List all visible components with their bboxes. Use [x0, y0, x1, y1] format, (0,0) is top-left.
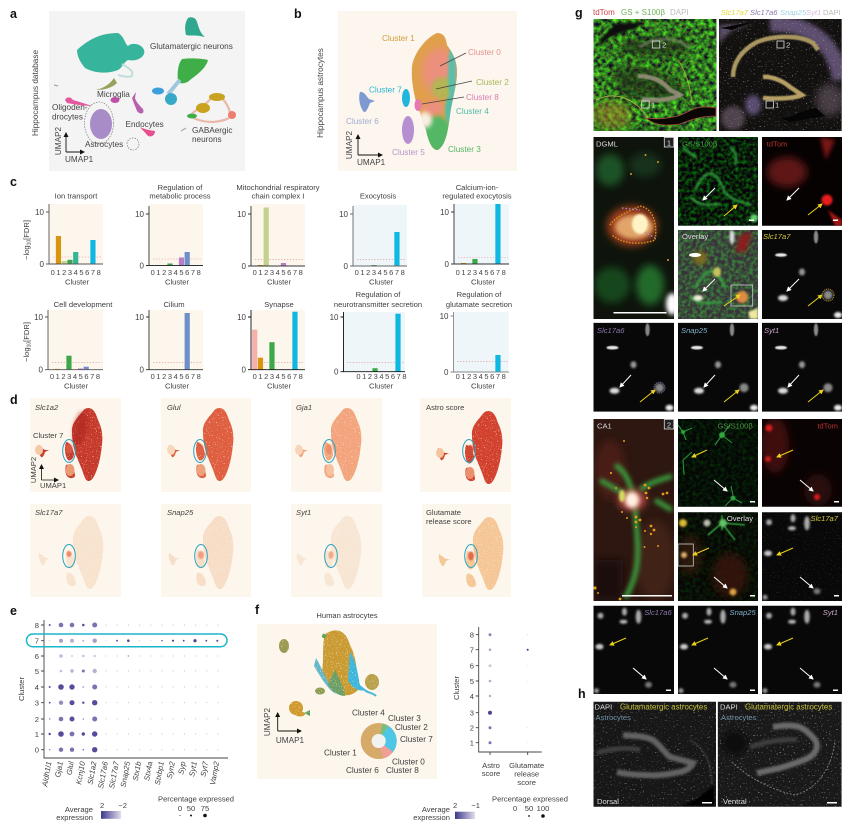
UMAP axes: UMAP1: [65, 155, 94, 164]
score dot plot: Cluster: [452, 676, 461, 700]
map: Slc1a2: [29, 398, 121, 492]
gene labels: Syn2: [165, 760, 177, 779]
cluster labels: Cluster 7: [369, 86, 402, 94]
legend: average expression: 2: [100, 801, 104, 810]
donut labels: Cluster 2: [395, 723, 428, 732]
map: Syt1: Syt1: [296, 508, 311, 517]
chart: cell development: 0: [39, 366, 44, 375]
image: hippocampus tdTom GS S100b: [594, 19, 716, 131]
panel label g: g: [575, 6, 583, 20]
image: GS S100b top: [678, 137, 758, 226]
image: CA1 merged: 2: [667, 420, 671, 430]
panel c: bar charts: [10, 175, 512, 390]
cluster labels: Cluster 0: [468, 48, 501, 57]
y label: Hippocampus astrocytes: [316, 48, 325, 138]
cluster tick labels: 1: [35, 730, 39, 739]
score dot plot: 3: [470, 709, 474, 718]
image: hippocampus Slc17a7 Slc17a6 Snap25 Syt1: 2: [786, 40, 790, 50]
chart: exocytosis: 0: [344, 262, 349, 271]
map: Slc1a2: Cluster 7: [33, 431, 63, 440]
image: ventral: DAPI: [720, 702, 738, 712]
cluster tick labels: 8: [35, 621, 39, 630]
chart: regulation of neurotransmitter secretion: 0: [334, 368, 339, 377]
map: Glul: [161, 398, 251, 492]
legend: average expression: expression: [56, 813, 93, 822]
image: DGML merged: 1: [667, 138, 671, 148]
donut labels: Cluster 8: [386, 766, 419, 775]
image: DGML merged: DGML: [596, 140, 618, 148]
chart: regulation of metabolic process: 10: [135, 210, 145, 219]
legend: average expression: Average: [65, 805, 93, 814]
chart: regulation of neurotransmitter secretion: Regulation of: [356, 290, 401, 299]
legend left: DAPI: [670, 8, 689, 17]
panel d: feature UMAPs: [10, 393, 511, 597]
UMAP axes: UMAP1: [276, 736, 305, 745]
map: glutamate release score: [422, 504, 511, 597]
map: astro score: [420, 398, 511, 492]
image: Slc17a6 top: Slc17a6: [597, 326, 625, 335]
panel b: hippocampus astrocyte UMAP: [294, 7, 517, 171]
chart: cell development: [FDR]: [22, 322, 31, 342]
chart: mitochondrial respiratory chain complex I: 10: [237, 210, 247, 219]
chart: cell development: 0 1 2 3 4 5 6 7 8: [50, 372, 100, 381]
legend: average expression: 2: [453, 801, 457, 810]
UMAP axes: [54, 126, 94, 164]
panel b background: [338, 11, 517, 171]
gene labels: Snap25: [119, 760, 132, 788]
legend right: Slc17a6: [750, 8, 778, 17]
image: ventral: Glutamatergic astrocytes: [745, 702, 832, 712]
image: overlay bottom: Overlay: [727, 514, 753, 523]
chart: regulation of metabolic process: [135, 183, 211, 286]
cluster labels: Cluster 1: [382, 34, 415, 43]
donut labels: Cluster 4: [352, 708, 385, 718]
image: Slc17a6 bottom: Slc17a6: [644, 608, 672, 617]
gene labels: Aldh1l1: [40, 761, 53, 788]
panel label f: f: [255, 603, 260, 617]
gene labels: Stx1b: [131, 761, 143, 781]
score dot plot: score: [482, 769, 500, 778]
image: hippocampus Slc17a7 Slc17a6 Snap25 Syt1: 1: [775, 100, 779, 110]
donut labels: Cluster 6: [346, 766, 379, 775]
image: overlay bottom: [678, 512, 758, 601]
legend: percentage expressed: 75: [201, 804, 209, 813]
score dot plot: 2: [470, 724, 474, 733]
legend: average expression: [413, 801, 480, 822]
image: tdTom top: tdTom: [767, 140, 787, 148]
gene labels: Vamp2: [208, 760, 221, 786]
panel f background: [257, 624, 437, 779]
legend right: Syt1: [806, 8, 821, 17]
chart: synapse: 10: [237, 313, 247, 322]
chart: calcium-ion-regulated exocytosis: Cluster: [471, 278, 495, 286]
chart: regulation of glutamate secretion: Cluster: [471, 382, 495, 390]
image: CA1 merged: CA1: [597, 422, 612, 430]
dot plot axes and ticks: [41, 620, 228, 758]
cluster tick labels: 0: [35, 746, 39, 755]
chart: ion transport: 10: [26, 240, 32, 245]
chart: cilium: Cilium: [163, 300, 185, 309]
image: ventral: Astrocytes: [721, 713, 757, 722]
image: Slc17a7 top: Slc17a7: [763, 232, 791, 241]
chart: synapse: 0: [242, 366, 247, 375]
chart: calcium-ion-regulated exocytosis: 0 1 2 3 4 5 6 7 8: [456, 268, 506, 277]
panel label e: e: [10, 604, 17, 618]
donut labels: Cluster 7: [400, 735, 433, 744]
cluster tick labels: 3: [35, 699, 39, 708]
image: ventral: [718, 702, 842, 807]
chart: regulation of metabolic process: 0: [140, 262, 145, 270]
cell type labels: neurons: [192, 135, 222, 144]
image: Snap25 bottom: Snap25: [730, 608, 756, 617]
chart: mitochondrial respiratory chain complex I: 0 1 2 3 4 5 6 7 8: [253, 268, 303, 277]
cluster tick labels: [17, 621, 39, 755]
cell type labels: Glutamatergic neurons: [150, 42, 233, 51]
chart: ion transport: Ion transport: [55, 192, 98, 200]
image: dorsal: Astrocytes: [596, 713, 631, 722]
chart: regulation of neurotransmitter secretion: 10: [330, 313, 339, 322]
panel label c: c: [10, 175, 17, 189]
gene labels: Gja1: [53, 761, 65, 778]
map: Slc17a7: Slc17a7: [35, 508, 63, 517]
score dot plot: release: [514, 770, 539, 778]
chart: cilium: 0 1 2 3 4 5 6 7 8: [151, 372, 201, 381]
image: Syt1 bottom: [762, 606, 842, 694]
image: dorsal: DAPI: [594, 702, 612, 712]
chart: ion transport: 10: [35, 208, 45, 217]
chart: regulation of neurotransmitter secretion: neurotransmitter secretion: [334, 300, 422, 309]
cluster labels: Cluster 4: [456, 107, 489, 116]
image: hippocampus Slc17a7 Slc17a6 Snap25 Syt1: [719, 19, 842, 131]
UMAP axes: UMAP1: [357, 158, 386, 167]
chart: exocytosis: [339, 192, 407, 286]
chart: calcium-ion-regulated exocytosis: regulated exocytosis: [442, 192, 512, 200]
highlight: cluster 7 row: [26, 634, 227, 647]
cell type labels: Oligoden-: [52, 103, 88, 112]
legend: percentage expressed: [158, 794, 234, 817]
cluster tick labels: 5: [35, 667, 39, 676]
chart: cilium: [135, 300, 203, 390]
chart: exocytosis: Exocytosis: [360, 192, 396, 200]
donut labels: Cluster 1: [324, 748, 357, 758]
map: Glul: Glul: [167, 403, 181, 412]
cluster labels: Cluster 3: [448, 145, 481, 154]
chart: regulation of metabolic process: Cluster: [165, 278, 189, 286]
cell type labels: drocytes: [52, 112, 83, 122]
chart: cilium: Cluster: [165, 382, 189, 390]
gene labels: Slc17a6: [96, 760, 110, 789]
cell type labels: Endocytes: [126, 120, 164, 129]
map: Gja1: [291, 398, 382, 492]
map: glutamate release score: Glutamate: [426, 508, 461, 517]
cell type labels: [52, 42, 233, 149]
legend: percentage expressed: Percentage expressed: [492, 794, 568, 804]
gene labels: Syp: [176, 761, 187, 775]
image: dorsal: [594, 702, 716, 807]
donut labels: Cluster 0: [392, 758, 425, 766]
legend left: tdTom: [593, 8, 615, 17]
legend: average expression: Average: [422, 805, 450, 814]
cluster tick labels: 6: [35, 652, 39, 661]
chart: mitochondrial respiratory chain complex I: Cluster: [267, 278, 291, 286]
chart: regulation of glutamate secretion: 10: [440, 312, 449, 321]
chart: exocytosis: 0 1 2 3 4 5 6 7 8: [355, 268, 405, 277]
gene labels: Syt7: [199, 760, 210, 777]
image: Snap25 top: [678, 322, 758, 412]
image: dorsal: Dorsal: [597, 797, 619, 806]
image: Snap25 bottom: [678, 606, 758, 694]
image: Slc17a6 top: [594, 322, 674, 412]
legend: percentage expressed: [492, 794, 568, 818]
donut labels: [324, 708, 433, 775]
panel label a: a: [10, 7, 18, 21]
expression dots: [48, 622, 218, 752]
chart: cell development: [22, 300, 113, 390]
cluster tick labels: Cluster: [17, 677, 26, 701]
image: tdTom bottom: tdTom: [817, 422, 838, 430]
chart: synapse: [237, 300, 305, 390]
chart: regulation of glutamate secretion: [440, 290, 512, 390]
image: overlay top: [678, 230, 758, 319]
image: Slc17a6 bottom: [594, 606, 674, 694]
chart: calcium-ion-regulated exocytosis: 0: [445, 260, 450, 269]
UMAP axes: [345, 130, 386, 167]
legend: average expression: −1: [471, 801, 480, 810]
image: hippocampus tdTom GS S100b: 2: [662, 40, 666, 50]
image: hippocampus tdTom GS S100b: 1: [651, 100, 655, 110]
legend: percentage expressed: 0: [178, 804, 182, 813]
chart: mitochondrial respiratory chain complex I: [236, 183, 320, 286]
chart: regulation of metabolic process: metabolic process: [149, 192, 211, 200]
map: Slc1a2: UMAP2: [29, 457, 38, 483]
score dot plot: 6: [470, 662, 474, 671]
astrocyte cluster blob: [412, 33, 457, 150]
image: Slc17a7 bottom: [762, 512, 842, 601]
legend: percentage expressed: 50: [525, 804, 533, 813]
gene labels: Stx4a: [142, 761, 154, 781]
chart: mitochondrial respiratory chain complex I: chain complex I: [252, 192, 304, 200]
image: ventral: Ventral: [723, 797, 747, 806]
image: DGML merged: [594, 137, 674, 319]
chart: regulation of metabolic process: 0 1 2 3 4 5 6 7 8: [151, 268, 201, 277]
gene labels: [40, 760, 221, 789]
image: GS S100b bottom: [678, 419, 758, 507]
score dot plot: 1: [470, 739, 474, 748]
image: CA1 merged: [594, 419, 674, 601]
cluster tick labels: 2: [35, 715, 39, 724]
chart: exocytosis: Cluster: [369, 278, 393, 286]
cluster labels: [346, 34, 509, 157]
legend right: DAPI: [823, 8, 841, 17]
map: Slc17a7: [30, 504, 121, 597]
chart: cilium: 10: [135, 313, 145, 322]
image: overlay top: Overlay: [682, 232, 708, 241]
map: astro score: Astro score: [426, 403, 464, 412]
chart: ion transport: 0: [40, 260, 45, 269]
chart: regulation of glutamate secretion: Regulation of: [457, 290, 502, 299]
legend: percentage expressed: 0: [513, 804, 517, 813]
gene labels: Slc1a2: [86, 760, 99, 785]
panel h: dorsal and ventral sections: [578, 687, 842, 807]
UMAP axes: [263, 707, 305, 745]
score dot plot: 7: [470, 646, 474, 655]
chart: mitochondrial respiratory chain complex I: Mitochondrial respiratory: [236, 183, 320, 192]
score dot plot: score: [517, 778, 536, 787]
chart: calcium-ion-regulated exocytosis: [440, 183, 512, 286]
score dot plot: 4: [470, 692, 474, 701]
leader lines: [422, 53, 472, 104]
map: Snap25: [161, 504, 251, 597]
image: Slc17a7 top: [762, 230, 842, 319]
image: dorsal: Glutamatergic astrocytes: [620, 702, 707, 712]
score dot plot: 5: [470, 677, 474, 686]
cluster labels: Cluster 6: [346, 117, 379, 126]
image: Syt1 top: Syt1: [764, 326, 779, 335]
chart: cell development: −log: [22, 347, 31, 362]
map: Snap25: Snap25: [167, 508, 194, 517]
gene labels: Slc17a7: [107, 760, 121, 789]
chart: ion transport: −log: [22, 245, 31, 260]
score dot plot: Glutamate: [509, 761, 544, 770]
chart: ion transport: [FDR]: [22, 220, 31, 240]
panel g: microscopy: [575, 6, 844, 694]
chart: regulation of glutamate secretion: glutamate secretion: [446, 300, 512, 309]
chart: regulation of neurotransmitter secretion: [330, 290, 422, 390]
legend: average expression: [56, 801, 127, 822]
chart: ion transport: Cluster: [65, 278, 89, 286]
map: Gja1: Gja1: [296, 403, 312, 412]
y label: Hippocampus database: [31, 50, 40, 136]
legend left: GS + S100β: [621, 8, 665, 17]
cell type labels: Microglia: [97, 90, 130, 99]
legend: percentage expressed: 50: [187, 804, 195, 813]
title: Human astrocytes: [316, 611, 378, 620]
chart: regulation of glutamate secretion: 0: [444, 368, 449, 377]
UMAP axes: UMAP2: [54, 126, 63, 155]
image: tdTom top: [762, 137, 842, 226]
score dot plot: [452, 627, 544, 787]
chart: mitochondrial respiratory chain complex I: 0: [242, 262, 247, 271]
cell type labels: GABAergic: [192, 126, 232, 135]
chart: cilium: 0: [140, 366, 145, 375]
chart: cell development: 10: [26, 342, 32, 347]
chart: cell development: Cluster: [64, 382, 88, 390]
cluster labels: Cluster 2: [476, 78, 509, 87]
chart: cell development: 10: [34, 313, 44, 322]
gene labels: Glul: [65, 760, 76, 776]
image: Snap25 top: Snap25: [681, 326, 708, 335]
donut chart: [366, 728, 391, 754]
chart: regulation of metabolic process: Regulation of: [158, 183, 203, 192]
human UMAP clusters: [279, 630, 379, 716]
image: Syt1 top: [762, 322, 842, 412]
map: Slc1a2: UMAP1: [40, 481, 66, 490]
panel label h: h: [578, 687, 586, 701]
cell type labels: Astrocytes: [85, 140, 123, 149]
cluster labels: Cluster 8: [466, 93, 499, 102]
chart: synapse: 0 1 2 3 4 5 6 7 8: [253, 372, 303, 381]
score dot plot: Astro: [482, 761, 500, 770]
legend: average expression: −2: [118, 801, 127, 810]
gene labels: Stxbp1: [153, 761, 166, 786]
cluster labels: Cluster 5: [392, 148, 425, 157]
image: GS S100b top: GS/S100β: [682, 140, 718, 148]
chart: regulation of glutamate secretion: 0 1 2 3 4 5 6 7 8: [456, 372, 506, 381]
image: GS S100b bottom: GS/S100β: [718, 422, 753, 430]
panel label d: d: [10, 393, 18, 407]
cluster tick labels: 4: [35, 683, 39, 692]
gene labels: Kcnj10: [74, 760, 87, 785]
image: tdTom bottom: [762, 419, 842, 507]
panel a background: [49, 11, 245, 171]
panel f: human astrocytes: [255, 603, 568, 822]
chart: exocytosis: 10: [339, 210, 349, 219]
panel label b: b: [294, 7, 302, 21]
image: Slc17a7 bottom: Slc17a7: [811, 514, 839, 523]
chart: synapse: Cluster: [267, 382, 291, 390]
UMAP axes: UMAP2: [345, 130, 354, 159]
gene labels: Syt1: [187, 761, 199, 777]
legend: average expression: expression: [413, 813, 450, 822]
map: glutamate release score: release score: [426, 517, 472, 526]
panel a: hippocampus database UMAP: [10, 7, 245, 171]
chart: ion transport: [22, 192, 103, 286]
legend right: Slc17a7: [721, 8, 749, 17]
chart: calcium-ion-regulated exocytosis: Calcium-ion-: [456, 183, 499, 192]
chart: regulation of neurotransmitter secretion: 0 1 2 3 4 5 6 7 8: [356, 372, 407, 381]
legend: percentage expressed: Percentage expressed: [158, 794, 234, 804]
chart: regulation of neurotransmitter secretion: Cluster: [369, 382, 393, 390]
UMAP axes: UMAP2: [263, 707, 272, 736]
legend right: Snap25: [780, 8, 807, 17]
map: Syt1: [291, 504, 382, 597]
donut labels: Cluster 3: [388, 714, 421, 723]
map: Slc1a2: Slc1a2: [35, 403, 59, 412]
small clusters: [359, 89, 422, 144]
legend: percentage expressed: 100: [537, 804, 549, 813]
chart: synapse: Synapse: [264, 300, 294, 309]
cluster tick labels: 7: [35, 637, 39, 646]
chart: cell development: Cell development: [54, 300, 113, 309]
panel e: dot plot: [10, 604, 234, 822]
chart: ion transport: 0 1 2 3 4 5 6 7 8: [51, 268, 101, 277]
UMAP cell clusters: [54, 17, 236, 150]
chart: calcium-ion-regulated exocytosis: 10: [440, 208, 450, 217]
score dot plot: 8: [470, 631, 474, 640]
image: Syt1 bottom: Syt1: [823, 608, 838, 617]
